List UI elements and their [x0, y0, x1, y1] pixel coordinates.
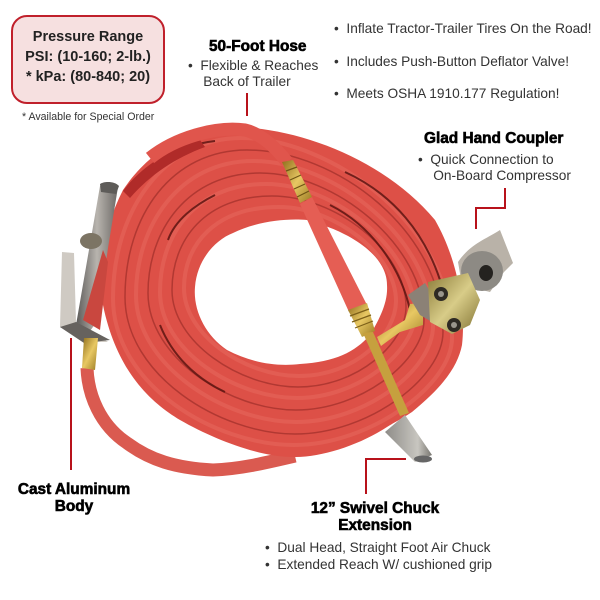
text: chuck description: • Dual Head, Straight Foot Air Chuck: [265, 540, 490, 555]
brass collar: [348, 303, 375, 337]
heading: swivel chuck extension: Extension: [338, 517, 412, 534]
text: chuck description: [265, 540, 492, 572]
heading: cast aluminum body: [18, 481, 130, 515]
glad hand coupler: [408, 230, 513, 334]
feature list: • Meets OSHA 1910.177 Regulation!: [334, 86, 559, 101]
hose brass ferrule: [282, 160, 312, 203]
coil highlights: [113, 138, 452, 445]
text: coupler description: [418, 152, 571, 183]
feature list: • Includes Push-Button Deflator Valve!: [334, 54, 569, 68]
text: coupler description: • Quick Connection to: [418, 152, 554, 167]
brass fitting to coupler: [377, 303, 423, 346]
coil grooves: [125, 150, 443, 434]
straight hose section: [150, 129, 367, 312]
hose tail: [87, 368, 295, 470]
text: hose description: [188, 58, 318, 89]
chuck extension: [363, 332, 432, 462]
hose coil: [102, 127, 463, 457]
text: hose description: • Flexible & Reaches: [188, 58, 318, 73]
heading: cast aluminum body: Cast Aluminum: [18, 481, 130, 498]
text: chuck description: • Extended Reach W/ cushioned grip: [265, 557, 492, 572]
pointer lines: [71, 93, 505, 494]
pressure range box: * kPa: (80-840; 20): [26, 69, 150, 85]
heading: swivel chuck extension: 12” Swivel Chuck: [311, 500, 439, 517]
special order note: * Available for Special Order: [22, 111, 154, 123]
heading: cast aluminum body: Body: [55, 498, 93, 515]
heading: swivel chuck extension: [311, 500, 440, 534]
pressure range box: [11, 15, 165, 104]
heading: glad hand coupler: Glad Hand Coupler: [424, 130, 563, 147]
cast aluminum body: [60, 182, 119, 370]
heading: 50-foot hose: 50-Foot Hose: [209, 38, 306, 55]
feature list: [334, 21, 592, 101]
pressure range box: Pressure Range: [33, 29, 143, 45]
text: hose description: Back of Trailer: [203, 74, 291, 89]
pressure range box: PSI: (10-160; 2-lb.): [25, 49, 151, 65]
coil deep shadows: [160, 141, 440, 392]
text: coupler description: On-Board Compressor: [433, 168, 571, 183]
feature list: • Inflate Tractor-Trailer Tires On the Road!: [334, 21, 592, 36]
